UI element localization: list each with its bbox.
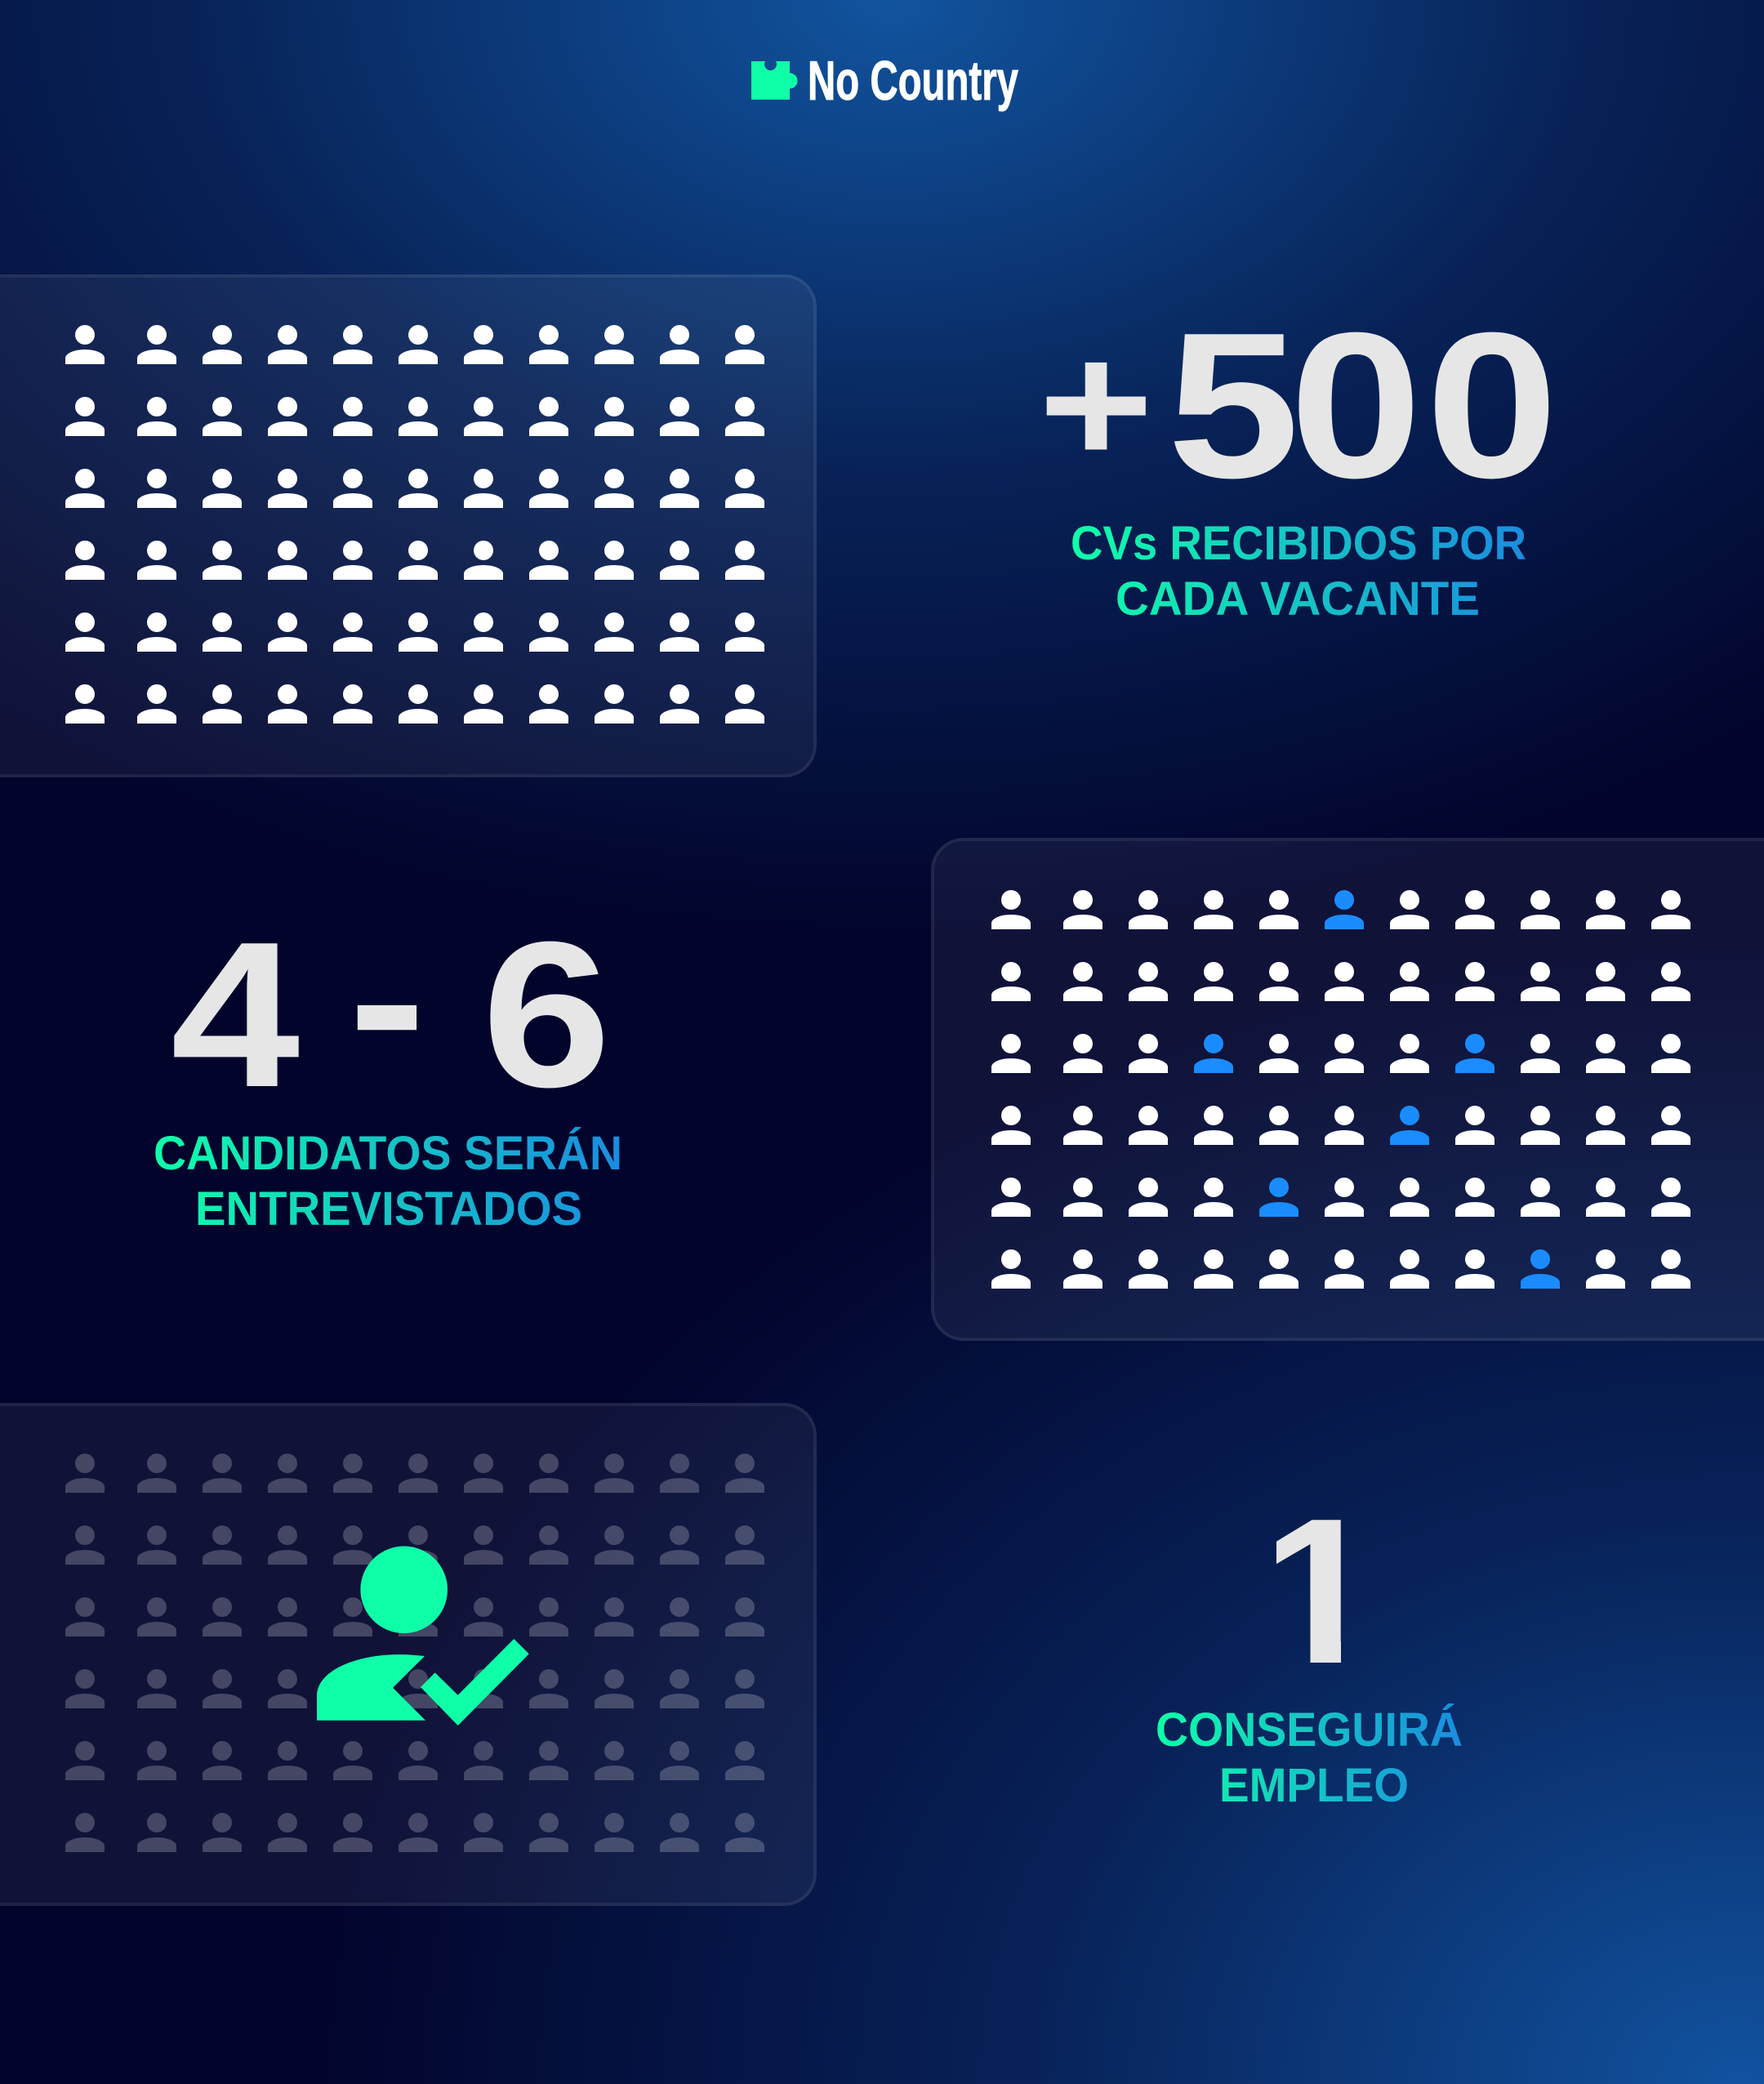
label: candidatos serán entrevistados: ENTREVISTADOS xyxy=(195,1182,582,1236)
label: CVs recibidos por cada vacante: CADA VACANTE xyxy=(1116,572,1480,626)
logo wordmark: No Country xyxy=(808,50,1018,112)
stat: +500 CVs xyxy=(1039,290,1558,626)
big number: +500: 500 xyxy=(1167,290,1558,522)
panel: 500 CVs people grid xyxy=(0,274,817,777)
panel background xyxy=(931,838,1764,1341)
label: conseguirá empleo: CONSEGUIRÁ xyxy=(1156,1703,1463,1757)
icon: puzzle piece xyxy=(751,61,797,100)
big number: +500: + xyxy=(1039,308,1154,500)
label: CVs recibidos por cada vacante: CVs RECIBIDOS POR xyxy=(1071,517,1526,570)
big number: 4 - 6: 6 xyxy=(412,899,611,1131)
label: conseguirá empleo: EMPLEO xyxy=(1219,1759,1409,1812)
big number: 4 - 6: 4 xyxy=(171,899,339,1131)
stat: 1 empleo xyxy=(1157,1520,1462,1801)
panel background xyxy=(0,1403,817,1906)
people grid: white xyxy=(65,325,764,724)
icon: green person with check mark xyxy=(317,1546,529,1726)
panel: 4-6 selected people grid xyxy=(931,838,1764,1341)
people grid: dimmed xyxy=(65,1454,764,1852)
panel: hired person xyxy=(0,1403,817,1906)
panel background xyxy=(0,274,817,777)
big number: 1: 1 xyxy=(1258,1475,1382,1707)
panel border xyxy=(0,1405,815,1904)
panel border xyxy=(933,839,1764,1339)
label: candidatos serán entrevistados: CANDIDATOS SERÁN xyxy=(154,1127,622,1180)
big number: 4 - 6: - xyxy=(349,884,425,1116)
panel border xyxy=(0,276,815,776)
people grid: white and blue xyxy=(991,890,1690,1289)
logo: No Country xyxy=(751,50,1018,112)
stat: 4 - 6 candidatos xyxy=(154,884,622,1236)
